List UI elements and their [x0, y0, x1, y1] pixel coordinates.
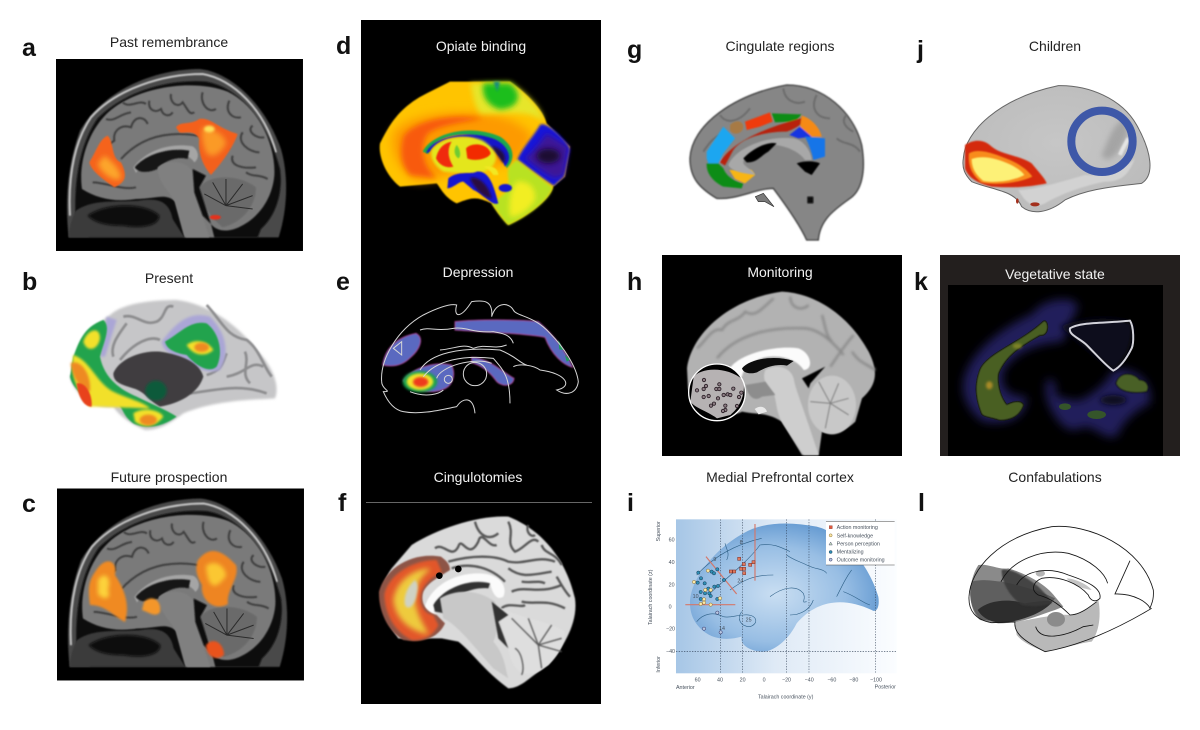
- title g: Cingulate regions: [726, 38, 834, 54]
- black background h: [662, 255, 902, 456]
- panel j: children: [916, 36, 1150, 212]
- panel i: medial prefrontal cortex: [627, 469, 897, 701]
- column d e f black background: [361, 20, 601, 704]
- title b: Present: [145, 270, 193, 286]
- axis labels i: [648, 521, 896, 701]
- label l: l: [918, 489, 925, 517]
- title h: Monitoring: [747, 264, 813, 280]
- yellow regions b: [73, 330, 213, 426]
- black scan k: [948, 285, 1163, 456]
- white outline k: [1070, 321, 1133, 371]
- label h: h: [627, 268, 642, 296]
- axis labels i: 20: [740, 677, 746, 683]
- label k: k: [914, 268, 928, 296]
- dark background k: [940, 255, 1180, 456]
- legend i: Mentalizing: [837, 550, 864, 556]
- axis labels i: −100: [870, 677, 882, 683]
- title k: Vegetative state: [1005, 266, 1105, 282]
- title f: Cingulotomies: [434, 469, 522, 485]
- axis labels i: 0: [763, 677, 766, 683]
- axis labels i: Inferior: [656, 656, 662, 673]
- panel d: opiate binding: [336, 32, 570, 225]
- panel c: future prospection: [22, 469, 304, 680]
- rainbow brain d: [380, 82, 570, 225]
- brain photo f: [379, 517, 575, 688]
- inflated brain j: [963, 86, 1150, 212]
- chart i: [648, 519, 897, 701]
- region numbers i: 8: [740, 540, 743, 546]
- brain h: [687, 292, 875, 455]
- axis labels i: −40: [805, 677, 814, 683]
- lesion dots f: [436, 566, 462, 579]
- data markers i: [729, 557, 755, 575]
- lavender fringe b: [100, 315, 226, 371]
- axis labels i: Superior: [656, 521, 662, 541]
- panel b: present: [22, 268, 277, 430]
- region numbers i: 14: [719, 626, 725, 632]
- cingulate colored regions g: [707, 112, 825, 188]
- axis labels i: 40: [717, 677, 723, 683]
- axis labels i: Posterior: [875, 685, 896, 691]
- activation c: [89, 551, 237, 658]
- axis labels i: Anterior: [676, 685, 695, 691]
- brain g: [690, 85, 863, 240]
- axis labels i: −20: [782, 677, 791, 683]
- label e: e: [336, 268, 350, 296]
- title l: Confabulations: [1008, 469, 1102, 485]
- MRI brain a: [56, 59, 303, 251]
- title d: Opiate binding: [436, 38, 526, 54]
- MRI brain c: [57, 488, 304, 680]
- label a: a: [22, 34, 37, 62]
- axis labels i: −40: [666, 649, 675, 655]
- panel l: confabulations: [918, 469, 1153, 652]
- axis labels i: −60: [827, 677, 836, 683]
- legend i: Self-knowledge: [837, 533, 873, 539]
- axis labels i: 0: [669, 605, 672, 611]
- blue circle j: [1071, 111, 1133, 172]
- brain surface b: [70, 300, 277, 430]
- region numbers i: 10: [693, 594, 699, 600]
- panel e: depression: [336, 264, 578, 413]
- orange regions b: [71, 343, 209, 425]
- title a: Past remembrance: [110, 34, 228, 50]
- line brain e: [382, 301, 578, 413]
- axis labels i: 40: [669, 560, 675, 566]
- label g: g: [627, 36, 642, 64]
- region numbers i: 25: [746, 618, 752, 624]
- label c: c: [22, 490, 36, 518]
- legend i: Outcome monitoring: [837, 558, 885, 564]
- axis labels i: 60: [695, 677, 701, 683]
- panel a: past remembrance: [22, 34, 303, 251]
- scan brain k: [963, 299, 1150, 437]
- activation a: [89, 119, 238, 220]
- title i: Medial Prefrontal cortex: [706, 469, 854, 485]
- legend i: Action monitoring: [837, 525, 878, 531]
- monitoring circle h: [689, 364, 745, 421]
- panel f: cingulotomies: [338, 469, 592, 688]
- title e: Depression: [443, 264, 513, 280]
- legend i: [826, 521, 895, 565]
- cingulotomy arc f: [379, 556, 450, 641]
- green regions b: [70, 320, 220, 427]
- axis labels i: −80: [849, 677, 858, 683]
- axis labels i: Talairach coordinate (z): [648, 569, 654, 625]
- divider line f: [366, 502, 592, 503]
- panel g: cingulate regions: [627, 36, 863, 240]
- axis labels i: 60: [669, 538, 675, 544]
- axis labels i: Talairach coordinate (y): [758, 695, 814, 701]
- label i: i: [627, 489, 634, 517]
- title j: Children: [1029, 38, 1081, 54]
- title c: Future prospection: [111, 469, 227, 485]
- axis labels i: 20: [669, 582, 675, 588]
- label d: d: [336, 32, 351, 60]
- region numbers i: [693, 540, 752, 632]
- region numbers i: 9: [713, 557, 716, 563]
- label b: b: [22, 268, 37, 296]
- line brain l: [969, 526, 1153, 652]
- axis labels i: −20: [666, 627, 675, 633]
- label j: j: [916, 36, 924, 64]
- legend i: Person perception: [837, 542, 880, 548]
- red dividers i: [685, 524, 755, 605]
- panel h: monitoring: [627, 255, 902, 456]
- activation j: [965, 141, 1047, 206]
- blue activation e: [383, 320, 573, 392]
- panel k: vegetative state: [914, 255, 1180, 456]
- lesion shading l: [970, 565, 1100, 652]
- region numbers i: 24: [737, 578, 743, 584]
- label f: f: [338, 489, 347, 517]
